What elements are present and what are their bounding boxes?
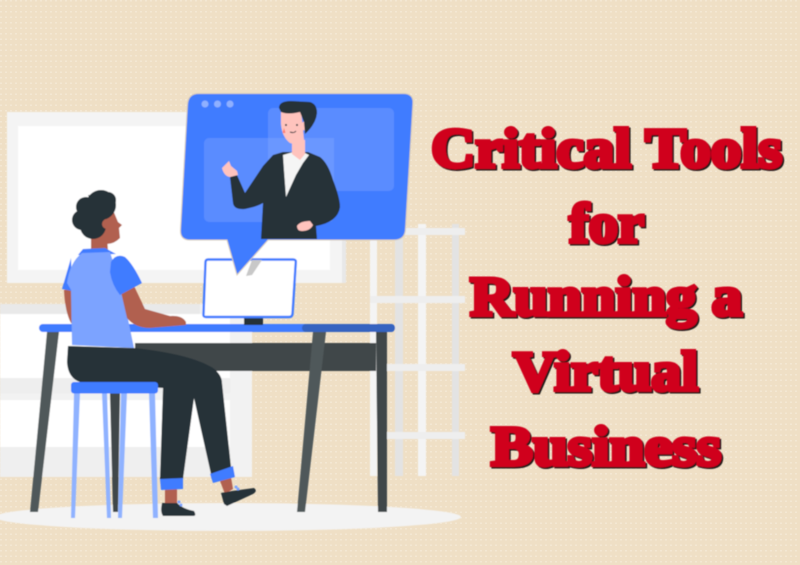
shirt torso	[67, 252, 134, 348]
title line: Running a: Running a	[470, 266, 742, 328]
title line: for: for	[570, 194, 646, 256]
hands	[222, 161, 238, 177]
neck	[91, 235, 108, 252]
monitor	[203, 260, 296, 325]
face	[96, 210, 122, 244]
title line: for: for	[569, 193, 644, 255]
video panels	[268, 108, 394, 191]
face	[281, 110, 304, 144]
sleeve	[110, 256, 142, 295]
desk	[30, 324, 395, 512]
title line: Virtual: Virtual	[514, 342, 700, 404]
window on wall	[7, 112, 346, 283]
title line: Critical Tools: Critical Tools	[431, 118, 782, 180]
illustration: video call at a desk	[0, 94, 465, 531]
title line: Critical Tools: Critical Tools	[432, 120, 784, 182]
back arm	[64, 288, 76, 325]
ladder shelf	[370, 224, 465, 476]
floor ellipse	[0, 503, 461, 531]
window dots	[202, 100, 234, 108]
title line: Virtual: Virtual	[513, 341, 698, 403]
title	[431, 118, 784, 480]
hair	[72, 190, 116, 239]
seated person	[62, 190, 256, 516]
speech bubble video call	[180, 94, 413, 275]
shirt	[283, 152, 309, 197]
shoes	[161, 503, 195, 516]
stool	[71, 382, 158, 518]
collar	[78, 248, 116, 255]
cuffs	[160, 478, 183, 490]
back sleeve	[62, 258, 72, 291]
background cabinet	[0, 304, 252, 477]
arm	[121, 286, 186, 328]
title line: Business: Business	[491, 416, 721, 478]
presenter	[222, 101, 340, 239]
title line: Business: Business	[492, 418, 722, 480]
jacket	[230, 152, 340, 239]
neck	[292, 140, 305, 160]
hair	[279, 101, 317, 134]
pants	[67, 346, 231, 479]
ankles	[165, 489, 177, 504]
title line: Running a: Running a	[472, 268, 744, 330]
